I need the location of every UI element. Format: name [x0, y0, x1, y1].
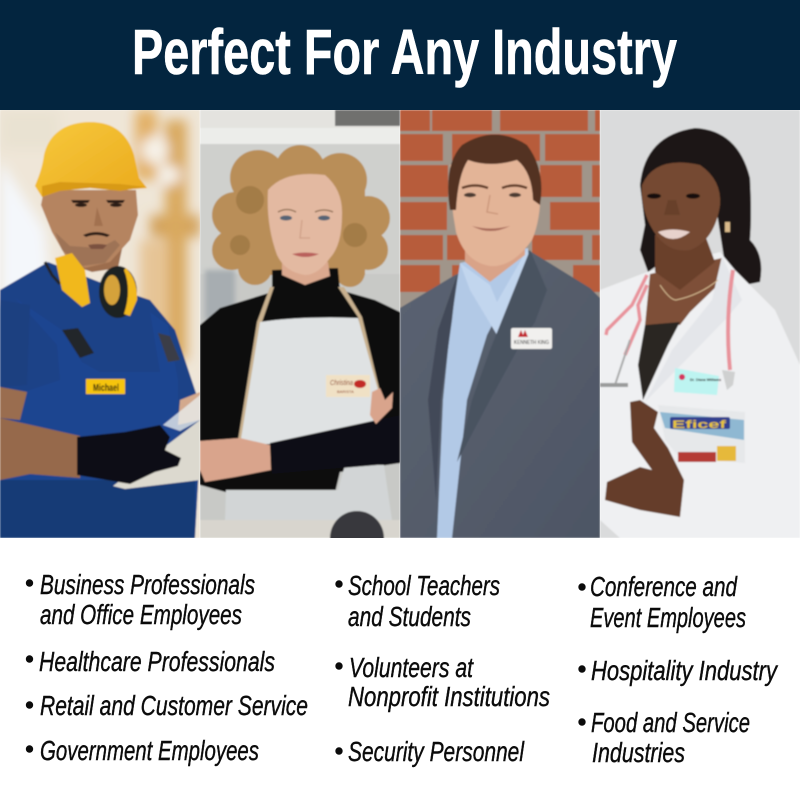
bullet item: business professionals	[26, 569, 255, 630]
book title: Eficef	[672, 419, 727, 431]
badge logo	[679, 374, 685, 380]
hair	[212, 145, 390, 287]
lab coat	[600, 252, 800, 538]
jacket	[400, 248, 600, 538]
hand and arm	[605, 400, 684, 517]
hands	[200, 438, 271, 482]
bare forearm	[0, 418, 80, 480]
eyes and mouth	[647, 193, 700, 239]
bullet item: volunteers: Volunteers at	[349, 652, 474, 683]
bullet item: government: Government Employees	[40, 735, 259, 766]
apron skirt	[225, 465, 392, 520]
badge name: Michael	[93, 383, 119, 394]
bullet item: conference: Event Employees	[590, 602, 746, 633]
book	[658, 405, 745, 463]
bullet item: school: School Teachers	[348, 570, 500, 601]
eyes and mouth	[462, 186, 527, 231]
glove	[77, 425, 181, 484]
eyes and brows	[71, 200, 125, 237]
bowl	[329, 510, 385, 538]
chest	[645, 258, 722, 325]
bullet list: column 2	[335, 570, 550, 767]
hair	[640, 128, 761, 285]
apron	[238, 287, 382, 445]
hard hat	[35, 122, 147, 197]
badge logo	[518, 330, 528, 337]
face	[642, 162, 720, 250]
bullet item: retail: Retail and Customer Service	[40, 690, 308, 721]
neck	[464, 248, 526, 282]
torso: black top	[200, 268, 400, 496]
stethoscope	[600, 270, 735, 390]
bullet item: school	[335, 570, 500, 632]
panel: businessman photo	[400, 110, 600, 538]
hair	[448, 134, 541, 210]
counter	[200, 520, 400, 538]
title banner	[0, 0, 800, 110]
badge name: Christina	[330, 380, 353, 387]
bullet list: column 1	[26, 569, 308, 766]
clipboard	[113, 420, 200, 489]
bullet item: volunteers: Nonprofit Institutions	[348, 681, 550, 712]
bullet item: business professionals: and Office Employees	[40, 599, 242, 630]
bullet item: food: Industries	[592, 737, 685, 768]
bullet item: food	[578, 707, 750, 768]
brick wall	[400, 110, 600, 292]
neck	[282, 262, 330, 285]
badge name: Dr. Diana Williams	[690, 378, 721, 382]
ear defenders	[45, 253, 137, 318]
lapels	[428, 275, 457, 500]
neck	[81, 248, 123, 273]
bullet item: school: and Students	[348, 601, 471, 632]
face	[268, 174, 342, 275]
shirt	[437, 248, 528, 538]
name badge: doctor	[674, 368, 721, 395]
earring	[725, 222, 730, 232]
bullet item: volunteers	[335, 652, 550, 712]
face	[450, 154, 541, 266]
badge logo	[354, 380, 366, 388]
face	[41, 190, 138, 268]
bullet item: business professionals: Business Professionals	[40, 569, 255, 600]
upper arm	[0, 387, 27, 420]
bullet item: healthcare: Healthcare Professionals	[39, 646, 275, 677]
name badge: Christina	[326, 375, 370, 397]
name badge: Michael	[86, 379, 125, 394]
badge name: KENNETH KING	[514, 340, 549, 346]
name badge: Kenneth King	[511, 328, 552, 349]
overall buckles	[62, 328, 94, 358]
eyes and mouth	[278, 210, 333, 257]
panel: doctor photo	[600, 110, 800, 538]
bullet list: column 3	[578, 571, 779, 768]
necklace	[660, 280, 718, 300]
panel: construction worker photo	[0, 110, 200, 538]
badge role: BARISTA	[337, 389, 354, 394]
crossed arms	[270, 415, 400, 474]
bullet item: security: Security Personnel	[348, 736, 525, 767]
neck	[655, 235, 715, 290]
safety glasses	[163, 395, 200, 431]
bullet item: conference: Conference and	[590, 571, 738, 602]
bullet item: conference	[578, 571, 746, 633]
panel: barista photo	[200, 110, 400, 565]
coat lapel	[645, 256, 742, 402]
dark top	[638, 322, 680, 400]
shirt and overalls	[0, 262, 200, 538]
